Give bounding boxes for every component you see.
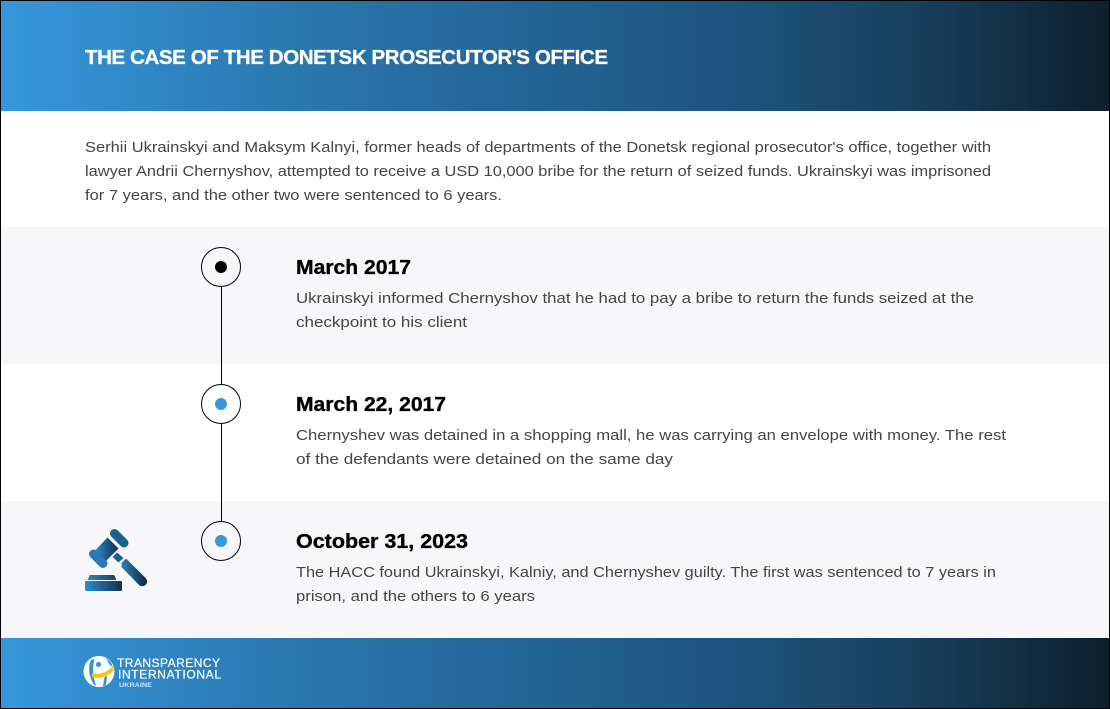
- timeline marker: March 2017: [202, 248, 240, 286]
- logo: Transparency International Ukraine: TRANSPARENCY: [117, 656, 220, 670]
- panel: March 2017 row background: [0, 227, 1110, 364]
- event: October 31, 2023: prison, and the others to 6 years: [296, 589, 535, 605]
- event: March 22, 2017: March 22, 2017: [296, 393, 446, 416]
- event: October 31, 2023: [296, 530, 996, 605]
- event: March 22, 2017: Chernyshev was detained in a shopping mall, he was carrying an envelope with money. The rest: [296, 428, 1006, 444]
- icon: gavel: [85, 534, 147, 591]
- event: October 31, 2023: October 31, 2023: [296, 530, 468, 553]
- intro text: [85, 140, 991, 204]
- timeline marker: March 22, 2017: [202, 384, 240, 424]
- event: March 2017: checkpoint to his client: [296, 315, 467, 331]
- event: March 22, 2017: of the defendants were detained on the same day: [296, 452, 674, 468]
- timeline connector: second segment: [220, 424, 222, 521]
- intro text: Serhii Ukrainskyi and Maksym Kalnyi, former heads of departments of the Donetsk regional prosecutor's office, together with: [85, 140, 991, 156]
- logo: Transparency International Ukraine: [84, 656, 221, 689]
- intro text: for 7 years, and the other two were sentenced to 6 years.: [85, 188, 502, 204]
- event: March 22, 2017: [296, 393, 1006, 468]
- header band: [0, 0, 1110, 111]
- logo: Transparency International Ukraine: INTERNATIONAL: [118, 668, 221, 682]
- timeline marker: October 31, 2023: [202, 522, 240, 560]
- title: THE CASE OF THE DONETSK PROSECUTOR'S OFFICE: [85, 46, 608, 69]
- event: March 2017: March 2017: [296, 256, 411, 279]
- event: October 31, 2023: The HACC found Ukrainskyi, Kalniy, and Chernyshev guilty. The first was sentenced to 7 years in: [296, 565, 996, 581]
- panel: October 31, 2023 row background: [0, 501, 1110, 638]
- logo: Transparency International Ukraine: UKRAINE: [119, 682, 153, 689]
- event: March 2017: Ukrainskyi informed Chernyshov that he had to pay a bribe to return the funds seized at the: [296, 291, 974, 307]
- intro text: lawyer Andrii Chernyshov, attempted to receive a USD 10,000 bribe for the return of seized funds. Ukrainskyi was imprisoned: [85, 164, 991, 180]
- footer band: [0, 638, 1110, 708]
- timeline connector: first segment: [220, 287, 222, 384]
- event: March 2017: [296, 256, 974, 331]
